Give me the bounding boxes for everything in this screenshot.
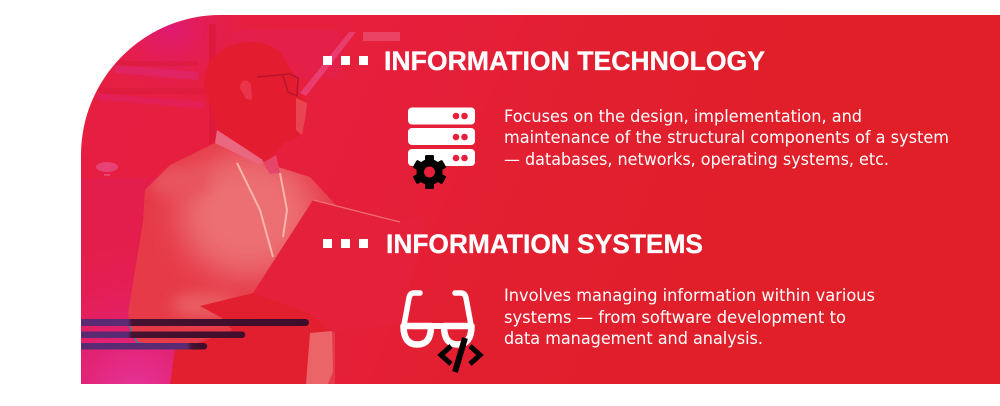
necktie — [263, 155, 280, 174]
bar 2 — [81, 332, 245, 338]
sleeve outline — [128, 323, 190, 348]
body text: information systems: data management and analysis. — [504, 329, 763, 348]
body text: information systems — [504, 286, 875, 348]
body text: information systems: Involves managing information within various — [504, 286, 875, 305]
face highlight — [296, 98, 307, 135]
icon: server stack with gear — [408, 108, 475, 189]
shirt collar — [215, 130, 263, 165]
photo: man holding laptop — [128, 42, 400, 384]
decorative bars — [81, 319, 309, 350]
laptop edge highlight — [313, 200, 400, 222]
icon: glasses with code symbol — [404, 293, 480, 372]
ear — [240, 81, 252, 100]
bar 3 — [81, 343, 207, 350]
heading bullets — [323, 56, 368, 65]
section: information technology — [323, 46, 949, 189]
right side torso — [306, 331, 333, 384]
trousers and tablet — [170, 293, 345, 384]
body text: information technology: Focuses on the design, implementation, and — [504, 107, 862, 126]
bar 1 — [81, 319, 309, 326]
body text: information technology: maintenance of the structural components of a system — [504, 128, 949, 147]
heading: information systems: INFORMATION SYSTEMS — [386, 229, 703, 259]
head and neck — [204, 42, 307, 162]
eyeglasses — [257, 74, 298, 96]
laptop — [253, 200, 426, 332]
sweater torso and arm — [120, 140, 340, 390]
lanyard — [237, 163, 287, 257]
section: information systems — [323, 229, 875, 372]
body text: information technology: — databases, networks, operating systems, etc. — [504, 150, 889, 169]
heading bullets — [323, 239, 368, 248]
heading: information technology: INFORMATION TECHNOLOGY — [384, 46, 765, 76]
body text: information systems: systems — from software development to — [504, 308, 846, 327]
body text: information technology — [504, 107, 949, 169]
